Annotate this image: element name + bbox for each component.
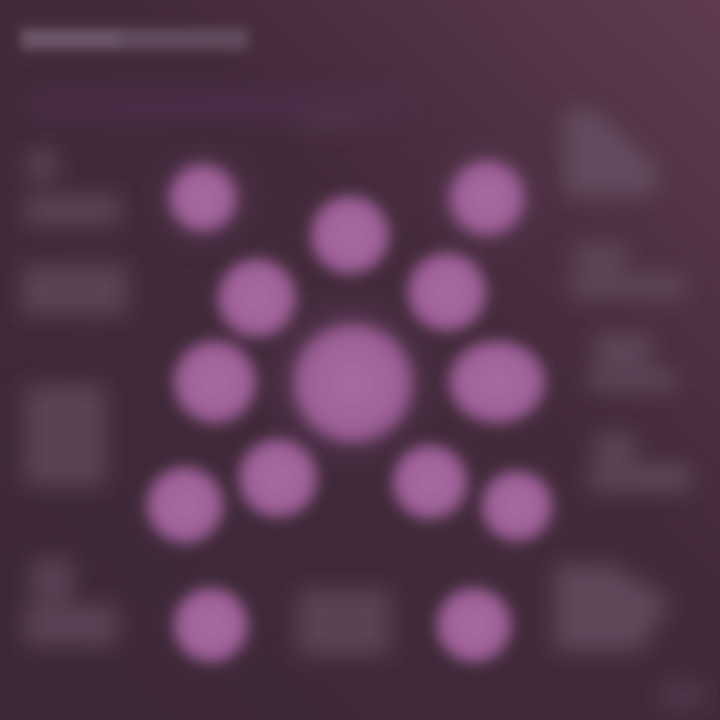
node: top right [449, 160, 525, 236]
panel: right text blocks [555, 110, 706, 707]
node: top left [169, 164, 237, 232]
text block: left 3 [25, 385, 105, 485]
node: middle left [173, 340, 257, 424]
text block: right 2 [590, 335, 675, 390]
node: bottom left [173, 587, 249, 663]
subtitle [30, 90, 405, 130]
footer mark [658, 683, 706, 707]
text block: bottom centre [298, 590, 390, 655]
circle nodes [146, 160, 553, 663]
icon: top right shape [565, 110, 660, 195]
diagram: network circles [146, 152, 553, 663]
glow behind circles [161, 152, 533, 455]
text block: left 4 [25, 560, 117, 645]
text block: right 3 [590, 435, 690, 490]
node: far lower left [146, 466, 224, 544]
node: far lower right [481, 470, 553, 542]
node: upper right [407, 252, 487, 332]
title [20, 28, 248, 50]
node: middle right [448, 340, 546, 424]
panel: left text blocks [22, 150, 127, 645]
node: lower right [392, 444, 468, 520]
node: upper left [217, 258, 297, 338]
node: centre hub [293, 323, 413, 443]
text block: right 4 [555, 565, 670, 650]
text block: left 1 [25, 150, 120, 225]
text block: left 2 [22, 265, 127, 315]
text block: right 1 [570, 245, 685, 297]
node: lower left [238, 438, 318, 518]
node: bottom right [436, 587, 512, 663]
node: top centre [310, 195, 390, 275]
